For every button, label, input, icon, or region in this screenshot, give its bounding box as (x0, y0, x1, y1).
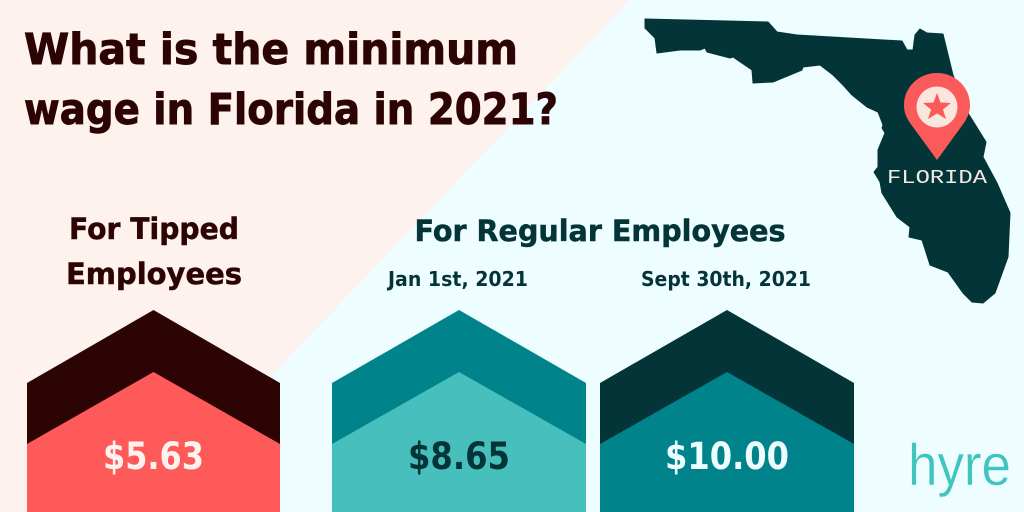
card: tipped wage (27, 310, 280, 512)
icon: location pin with star (904, 73, 970, 160)
heading: regular employees: For Regular Employees (414, 214, 786, 248)
heading: tipped employees (66, 212, 242, 291)
state silhouette (645, 19, 1010, 303)
card: regular wage January (332, 310, 586, 512)
card: regular wage September (600, 310, 854, 512)
logo: hyre: hyre (908, 433, 1011, 498)
title: wage in Florida in 2021? (24, 85, 558, 135)
map of Florida (645, 19, 1010, 303)
background: pink diagonal panel (0, 0, 630, 512)
date: September: Sept 30th, 2021 (641, 267, 811, 291)
date: January: Jan 1st, 2021 (386, 267, 528, 291)
card: regular wage January: $8.65 (408, 435, 510, 478)
card: tipped wage: $5.63 (103, 435, 204, 478)
map label: FLORIDA (887, 167, 988, 189)
heading: tipped employees: Employees (66, 257, 242, 291)
title (24, 25, 558, 135)
card: regular wage September: $10.00 (665, 435, 789, 478)
heading: tipped employees: For Tipped (69, 212, 239, 246)
title: What is the minimum (24, 25, 518, 75)
